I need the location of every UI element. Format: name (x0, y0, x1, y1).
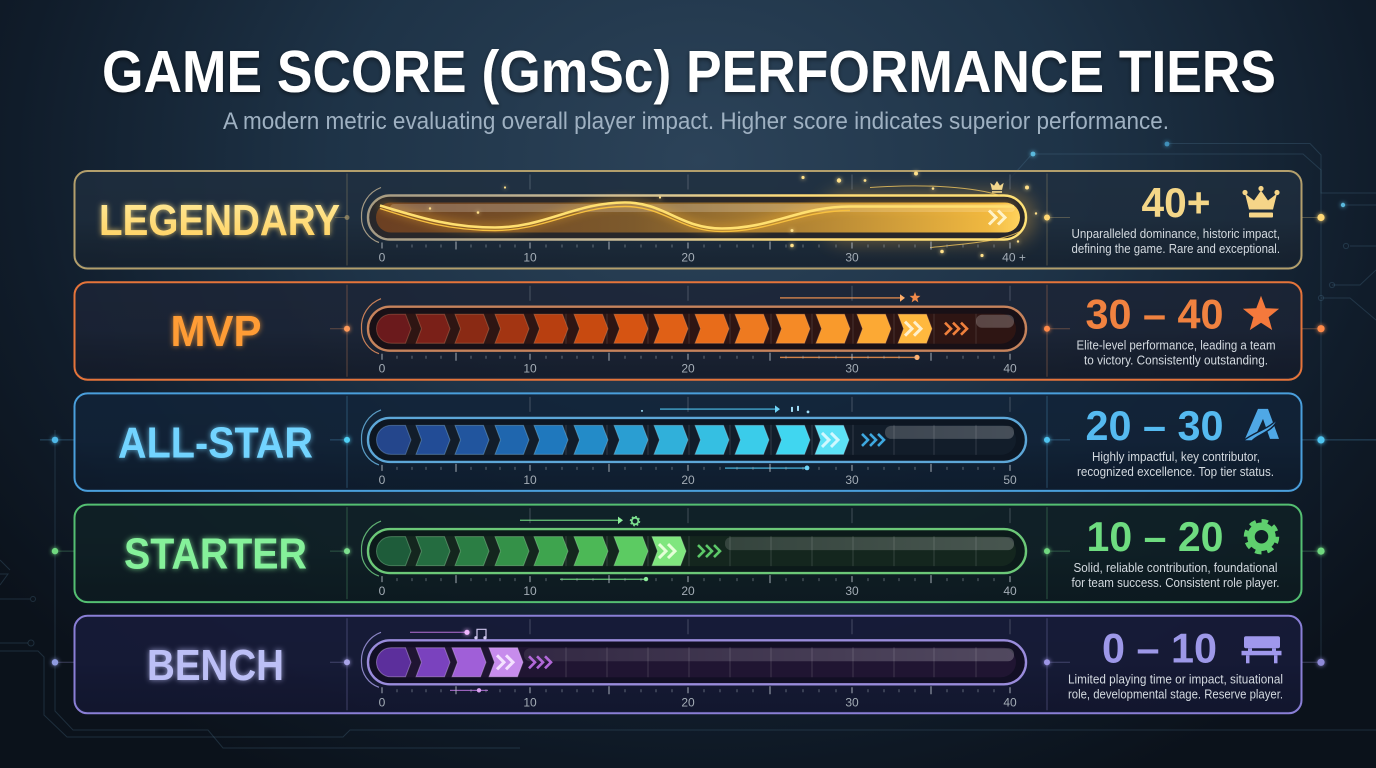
description: for team success. Consistent role player. (1072, 575, 1280, 590)
description: Elite-level performance, leading a team (1076, 338, 1276, 353)
sparkle particles (429, 172, 1037, 257)
description: defining the game. Rare and exceptional. (1072, 241, 1280, 256)
scale: 10 (523, 584, 537, 598)
icon: star (1243, 296, 1279, 330)
scale: 0 (379, 695, 386, 709)
scale: 20 (681, 250, 695, 264)
icon: crown (1242, 186, 1280, 218)
value: 20 – 30 (1086, 402, 1224, 449)
scale: 20 (681, 473, 695, 487)
icon: all-star A (1243, 409, 1279, 441)
scale: 30 (845, 250, 859, 264)
connectors and dividers (40, 396, 1376, 488)
description (1072, 560, 1280, 590)
scale: 10 (523, 473, 537, 487)
circuit lines background (0, 144, 1376, 748)
icon: small star (910, 292, 920, 302)
scale: 0 (379, 584, 386, 598)
icon: gear (1246, 521, 1277, 552)
scale: 30 (845, 362, 859, 376)
accent arrows (410, 630, 488, 692)
scale (379, 619, 1017, 709)
icon: bench (1242, 636, 1282, 663)
scale (379, 174, 1026, 264)
connectors and dividers (52, 618, 1325, 710)
value: 10 – 20 (1086, 513, 1224, 560)
accent arrows (660, 405, 809, 470)
title: GAME SCORE (GmSc) PERFORMANCE TIERS (102, 39, 1276, 105)
scale: 10 (523, 250, 537, 264)
panel shading (76, 506, 1300, 600)
label: LEGENDARY (99, 196, 340, 245)
label: BENCH (147, 641, 284, 690)
accent arrows (520, 517, 648, 581)
circuit nodes (1031, 142, 1345, 207)
panel: all-star (40, 393, 1376, 491)
progress bar (361, 632, 1026, 687)
progress bar (361, 188, 1035, 244)
scale: 30 (845, 584, 859, 598)
description (1072, 226, 1280, 256)
icon: small crown (990, 181, 1004, 193)
scale: 20 (681, 362, 695, 376)
scale: 0 (379, 250, 386, 264)
panel frame (74, 282, 1302, 380)
scale: 20 (681, 695, 695, 709)
panel: starter (52, 505, 1325, 602)
panel: mvp (74, 282, 1325, 380)
panel shading (76, 284, 1300, 378)
panel frame (74, 393, 1302, 491)
scale: 40 + (1002, 250, 1026, 264)
scale (379, 286, 1017, 376)
progress bar (361, 410, 1026, 465)
scale: 50 (1003, 473, 1017, 487)
scale: 40 (1003, 362, 1017, 376)
scale: 10 (523, 695, 537, 709)
value: 40+ (1142, 179, 1210, 226)
description: Unparalleled dominance, historic impact, (1072, 226, 1280, 241)
icon: small music note (474, 629, 487, 640)
scale: 10 (523, 362, 537, 376)
value: 30 – 40 (1086, 291, 1224, 338)
panel frame (74, 171, 1302, 268)
panel shading (76, 172, 1300, 266)
scale: 40 (1003, 695, 1017, 709)
scale: 40 (1003, 584, 1017, 598)
description (1068, 671, 1283, 701)
description: Solid, reliable contribution, foundational (1074, 560, 1278, 575)
scale: 0 (379, 473, 386, 487)
description: recognized excellence. Top tier status. (1077, 464, 1274, 479)
scale: 30 (845, 695, 859, 709)
panel frame (74, 616, 1302, 713)
panel: legendary (74, 171, 1325, 268)
description: Highly impactful, key contributor, (1092, 449, 1260, 464)
scale (379, 397, 1017, 487)
label: STARTER (124, 530, 307, 579)
panel shading (76, 617, 1300, 711)
description: Limited playing time or impact, situational (1068, 671, 1283, 686)
description: role, developmental stage. Reserve player. (1068, 686, 1283, 701)
label: MVP (170, 307, 262, 356)
description: to victory. Consistently outstanding. (1084, 353, 1268, 368)
icon: small gear (630, 516, 640, 526)
description (1076, 338, 1276, 368)
progress bar (361, 299, 1026, 354)
value: 0 – 10 (1102, 624, 1217, 671)
connectors and dividers (335, 174, 1325, 266)
connectors and dividers (52, 507, 1325, 599)
scale: 20 (681, 584, 695, 598)
panel shading (76, 395, 1300, 489)
connectors and dividers (330, 285, 1325, 377)
description (1077, 449, 1274, 479)
panel frame (74, 505, 1302, 602)
subtitle: A modern metric evaluating overall player impact. Higher score indicates superior performance. (223, 108, 1169, 135)
progress bar (361, 521, 1026, 576)
accent arrows (780, 294, 920, 360)
label: ALL-STAR (118, 418, 313, 467)
scale (379, 508, 1017, 598)
scale: 30 (845, 473, 859, 487)
small particles (641, 406, 809, 413)
scale: 0 (379, 362, 386, 376)
panel: bench (52, 616, 1325, 713)
swoosh accents (870, 186, 1020, 248)
